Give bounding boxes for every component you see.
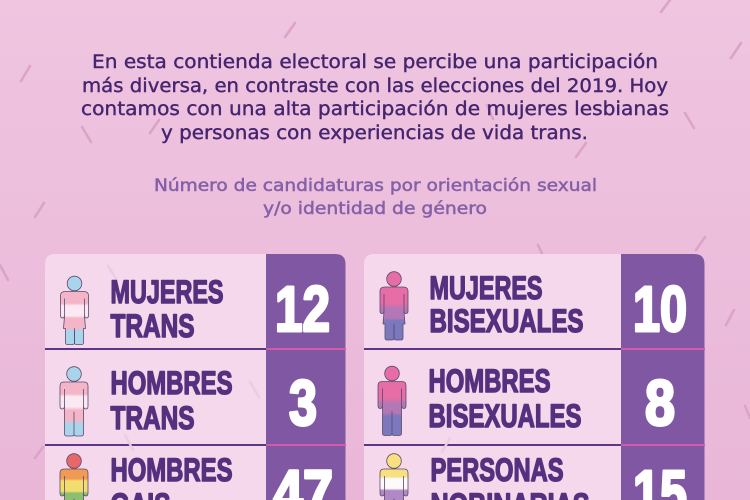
label: hombres gais: [110, 452, 232, 500]
row: personas no binarias: [380, 452, 687, 500]
label: hombres gais: HOMBRES: [110, 452, 232, 488]
faint strokes over right panel: [442, 438, 450, 452]
intro paragraph: contamos con una alta participación de mujeres lesbianas: [81, 99, 669, 120]
icon: trans man figure: [60, 367, 88, 436]
number: 12: 12: [275, 273, 330, 345]
label: personas no binarias: [430, 452, 590, 500]
left panel background: [45, 254, 266, 500]
panel: right candidaturas table: [364, 254, 705, 500]
label: hombres trans: TRANS: [110, 400, 194, 436]
label: mujeres bisexuales: BISEXUALES: [430, 303, 584, 339]
number: 3: 3: [289, 367, 317, 439]
chart subtitle: [154, 176, 597, 219]
icon: rainbow man figure: [60, 454, 88, 500]
number: 10: 10: [633, 273, 687, 345]
faint strokes over panel: [108, 266, 259, 450]
right number column: [621, 254, 704, 500]
label: mujeres trans: [110, 274, 224, 344]
left number column: [266, 254, 346, 500]
label: hombres bisexuales: HOMBRES: [428, 363, 550, 399]
icon: trans woman figure: [60, 276, 88, 344]
number: 8: 8: [645, 367, 675, 439]
row: hombres bisexuales: [378, 363, 675, 439]
icon: bisexual woman figure: [380, 272, 408, 340]
right panel background: [364, 254, 621, 500]
label: hombres trans: HOMBRES: [110, 365, 232, 401]
row: hombres trans: [60, 365, 317, 439]
label: mujeres bisexuales: [430, 270, 584, 339]
icon: non-binary figure: [380, 454, 408, 500]
icon: bisexual man figure: [378, 366, 406, 436]
label: mujeres bisexuales: MUJERES: [430, 270, 542, 306]
intro paragraph: más diversa, en contraste con las elecciones del 2019. Hoy: [82, 76, 668, 97]
row: mujeres trans: [60, 273, 330, 345]
label: hombres trans: [110, 365, 232, 436]
chart subtitle: y/o identidad de género: [263, 199, 487, 219]
intro paragraph: En esta contienda electoral se percibe una participación: [92, 52, 658, 73]
row: mujeres bisexuales: [380, 270, 687, 345]
row: hombres gais: [60, 452, 333, 500]
label: mujeres trans: MUJERES: [110, 274, 224, 310]
label: hombres bisexuales: [428, 363, 582, 434]
label: personas no binarias: PERSONAS: [430, 452, 564, 488]
intro paragraph: y personas con experiencias de vida trans.: [161, 123, 588, 144]
label: mujeres trans: TRANS: [110, 308, 194, 344]
intro paragraph: [81, 52, 669, 144]
label: hombres bisexuales: BISEXUALES: [428, 398, 582, 434]
panel: left candidaturas table: [45, 254, 346, 500]
chart subtitle: Número de candidaturas por orientación sexual: [154, 176, 597, 196]
